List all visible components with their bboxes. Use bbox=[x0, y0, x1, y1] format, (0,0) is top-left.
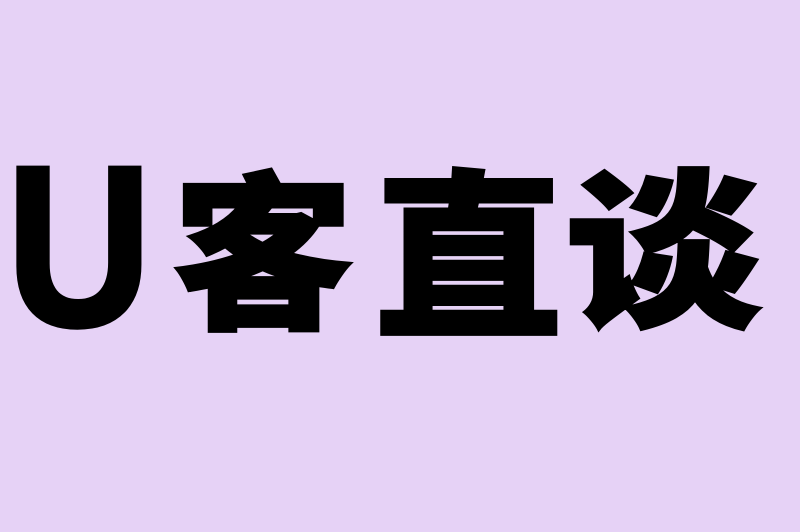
title: U客直谈: 谈 bbox=[565, 159, 761, 350]
title: U客直谈: 客 bbox=[173, 164, 353, 351]
title: U客直谈: 直 bbox=[374, 160, 563, 361]
title: U客直谈: U bbox=[6, 120, 152, 374]
